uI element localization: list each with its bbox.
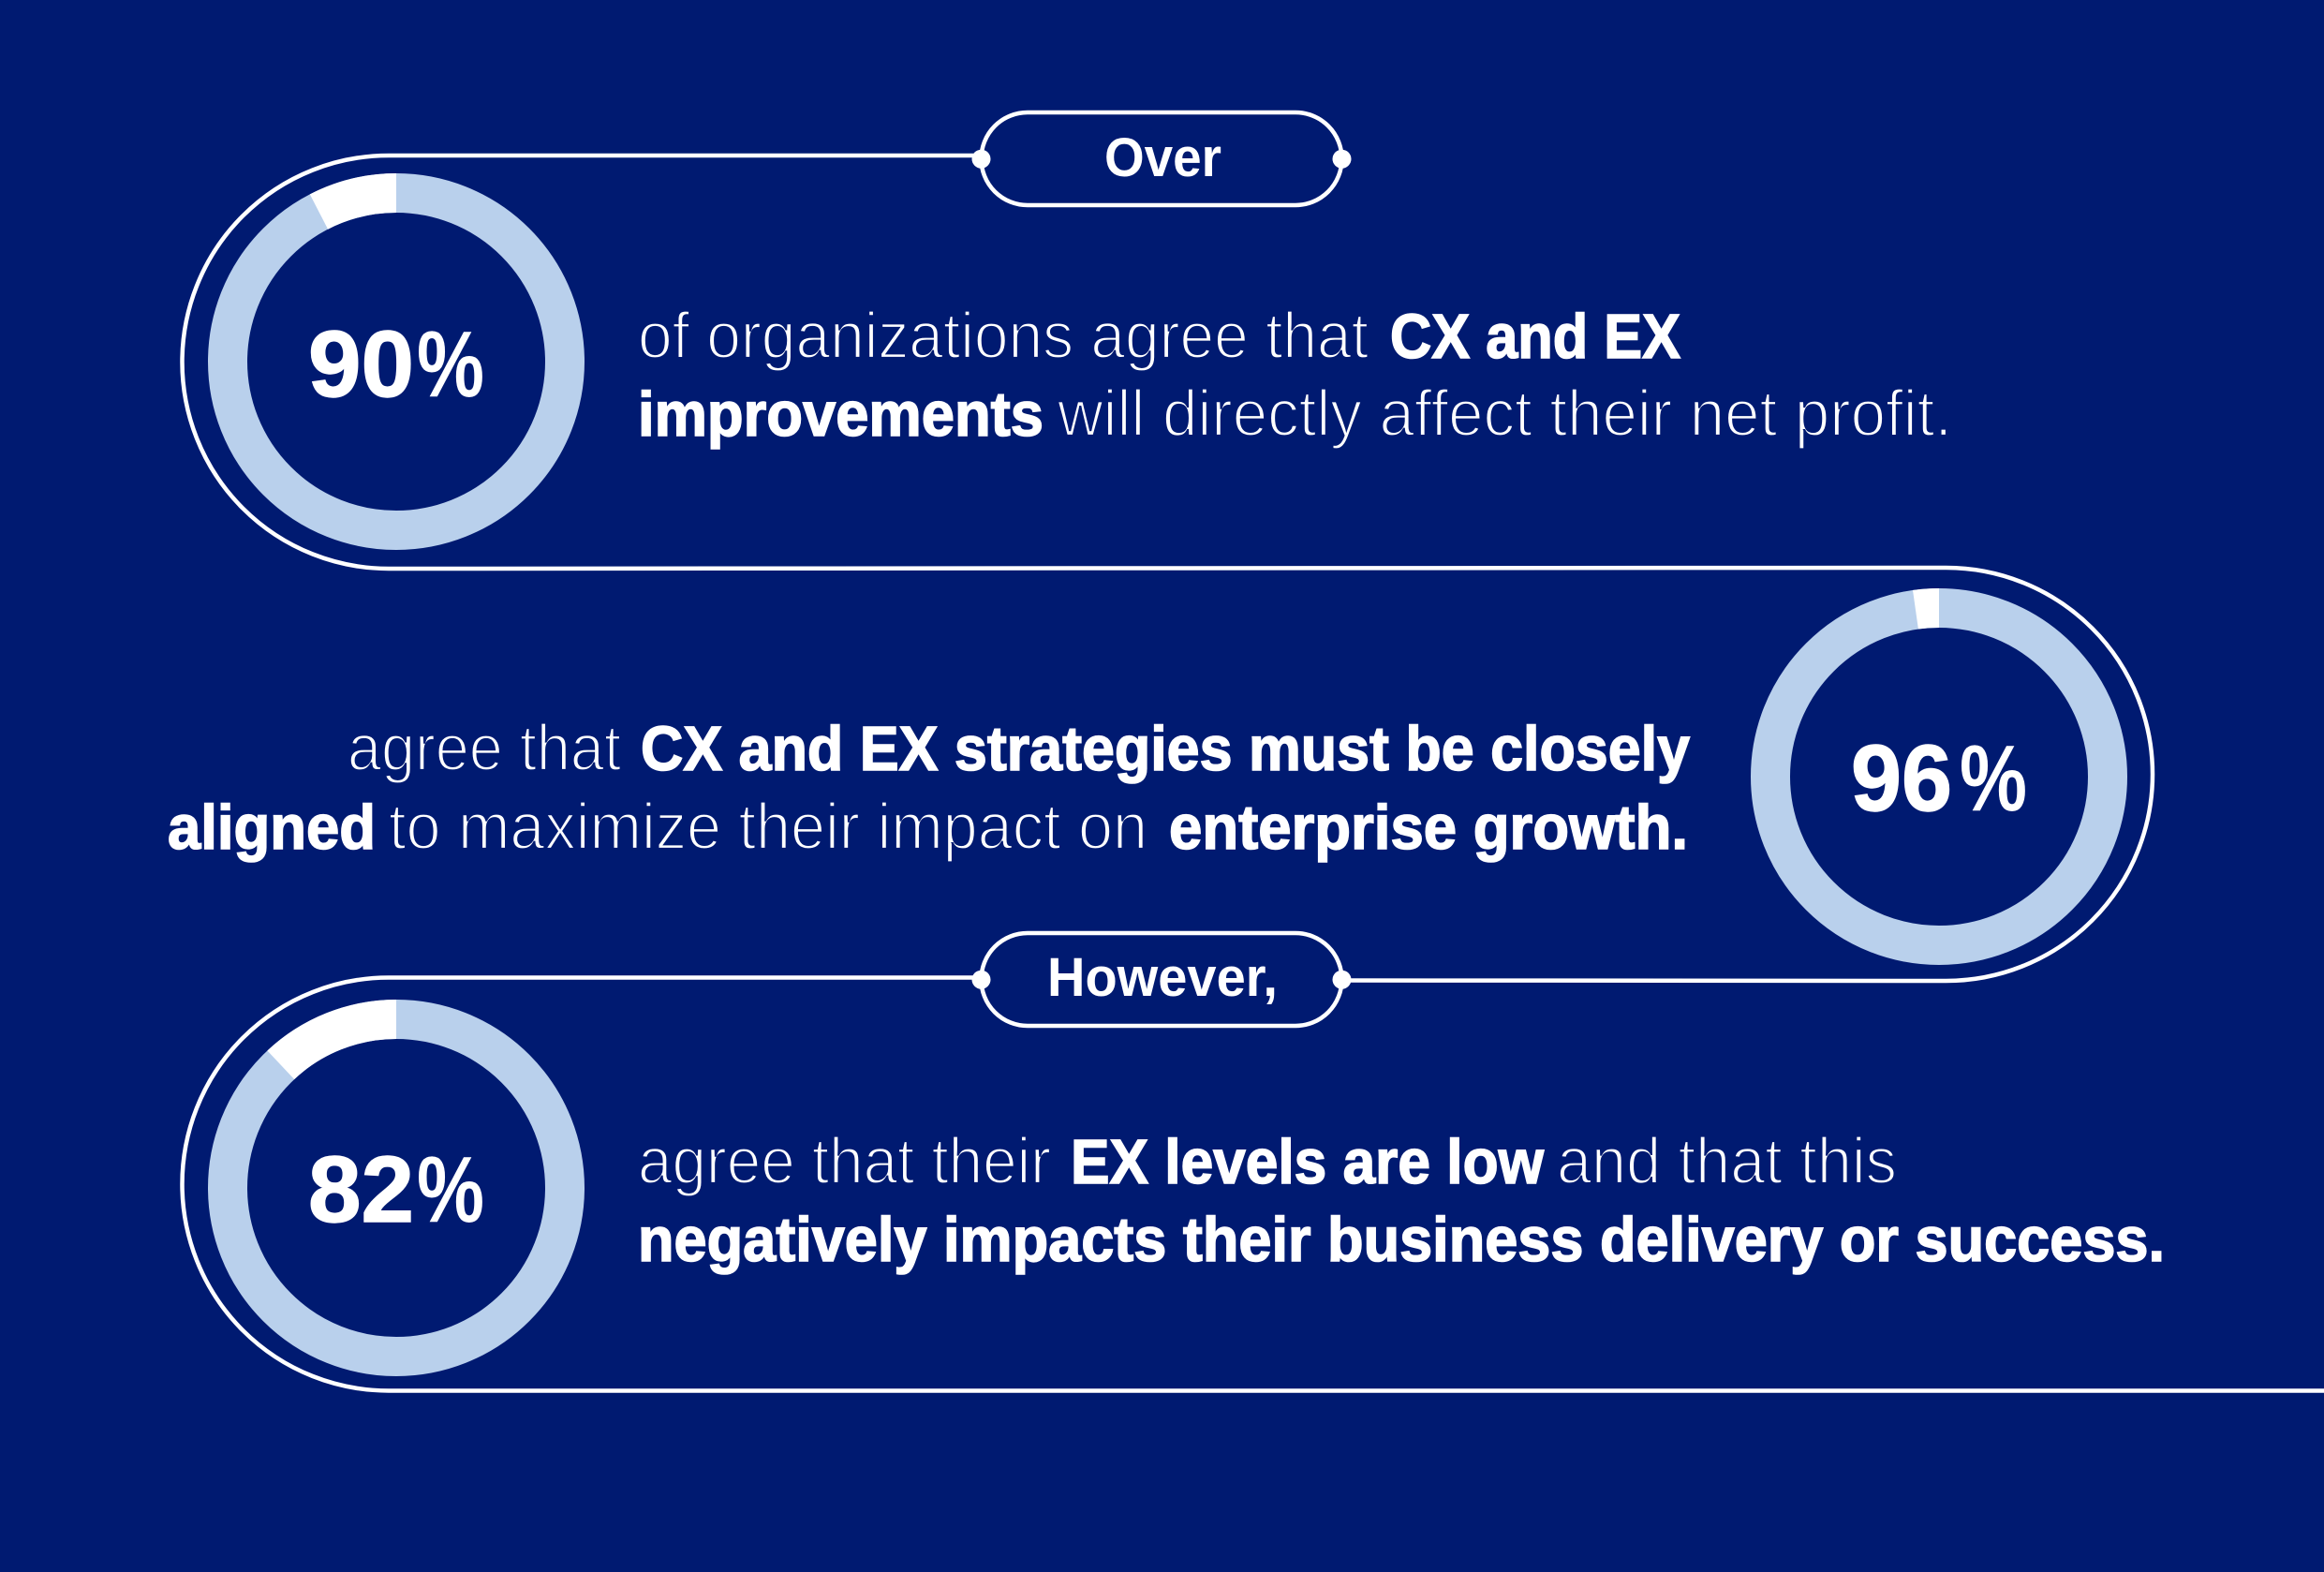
donut chart: 90%: 90: [308, 312, 414, 417]
text block: 96% statement: CX and EX strategies must be closely: [641, 714, 1690, 784]
donut chart: 90%: [228, 173, 565, 530]
pill: Over: Over: [1104, 127, 1221, 188]
text block: 82% statement: EX levels are low: [1071, 1127, 1545, 1197]
text block: 82% statement: negatively impacts their business delivery or success.: [638, 1205, 2165, 1275]
donut chart: 90%: %: [417, 312, 484, 417]
text block: 90% statement: of organizations agree that: [638, 299, 1369, 372]
donut chart: 82%: 82: [308, 1137, 414, 1242]
text block: 90% statement: improvements: [638, 379, 1044, 450]
pill: However: However,: [1047, 947, 1278, 1008]
text block: 96% statement: [168, 711, 1690, 863]
text block: 82% statement: and that this: [1557, 1124, 1897, 1197]
pill: Over: [972, 112, 1351, 205]
text block: 90% statement: CX and EX: [1390, 302, 1680, 372]
text block: 96% statement: aligned: [168, 793, 376, 863]
donut chart: 82%: %: [417, 1137, 484, 1242]
text block: 96% statement: enterprise growth.: [1169, 793, 1688, 863]
donut chart: 82%: [228, 1000, 565, 1357]
connector line: second loop from However pill to right page edge: [182, 978, 2324, 1390]
text block: 96% statement: to maximize their impact on: [389, 790, 1147, 863]
text block: 82% statement: agree that their: [638, 1124, 1051, 1197]
text block: 90% statement: will directly affect their net profit.: [1057, 377, 1952, 450]
text block: 96% statement: agree that: [348, 711, 621, 784]
connector line: first loop from Over pill around to However pill: [182, 156, 2153, 981]
pill: However: [972, 933, 1351, 1026]
text block: 90% statement: [638, 299, 1952, 450]
donut chart: 96%: %: [1960, 726, 2027, 831]
text block: 82% statement: [638, 1124, 2165, 1275]
donut chart: 96%: [1770, 588, 2108, 945]
donut chart: 96%: 96: [1851, 726, 1952, 831]
